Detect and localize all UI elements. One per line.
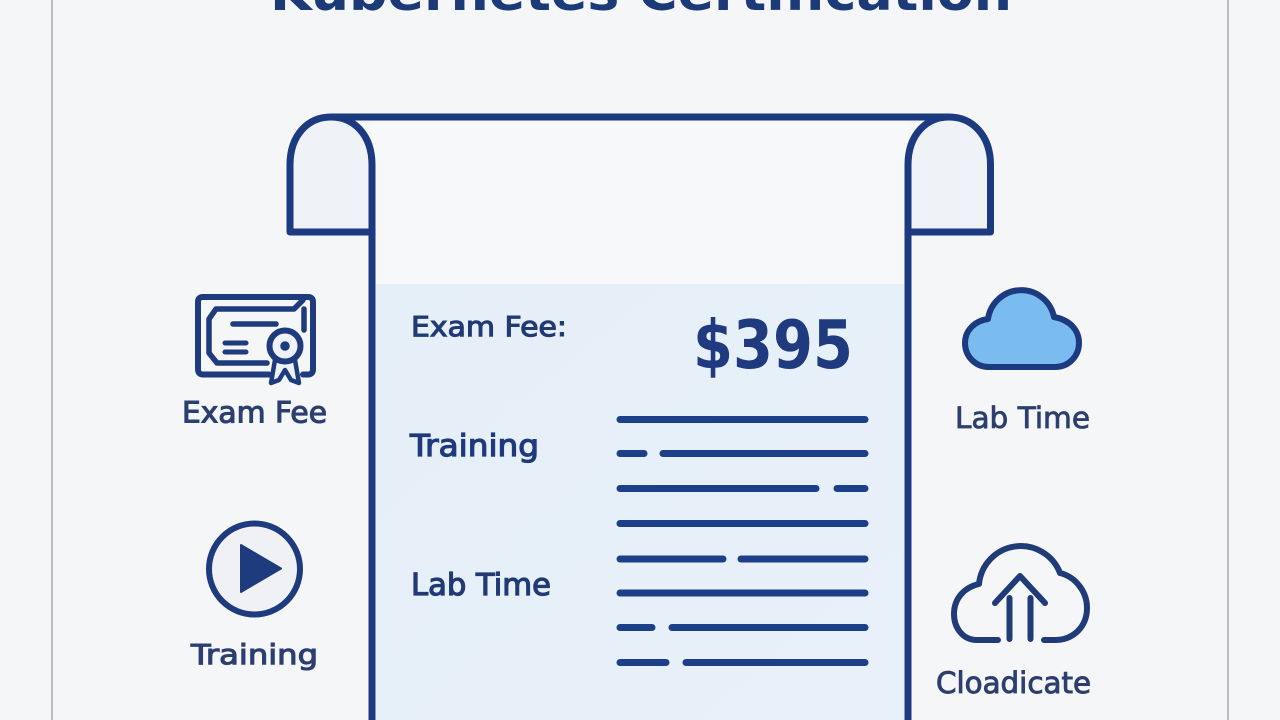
label: lab time icon: Lab Time <box>955 401 1090 435</box>
shaded content panel <box>376 284 904 720</box>
icon: filled cloud <box>965 290 1079 367</box>
right scroll curl <box>908 117 990 232</box>
scroll page <box>372 117 908 720</box>
label: exam fee icon: Exam Fee <box>182 396 327 430</box>
scroll document <box>290 117 990 720</box>
label: training icon: Training <box>190 638 318 671</box>
left scroll curl <box>290 117 372 232</box>
icon: certificate <box>198 297 313 383</box>
icon: upload cloud <box>954 546 1087 640</box>
amount: $395 <box>693 306 853 384</box>
placeholder text lines <box>620 420 865 662</box>
fee row <box>411 306 853 384</box>
scroll outline <box>331 117 949 720</box>
icon: play <box>209 524 300 614</box>
label: cloadicate: Cloadicate <box>936 666 1091 700</box>
label: exam fee: Exam Fee: <box>411 310 567 343</box>
label: lab time: Lab Time <box>411 568 551 603</box>
label: training: Training <box>409 429 539 464</box>
